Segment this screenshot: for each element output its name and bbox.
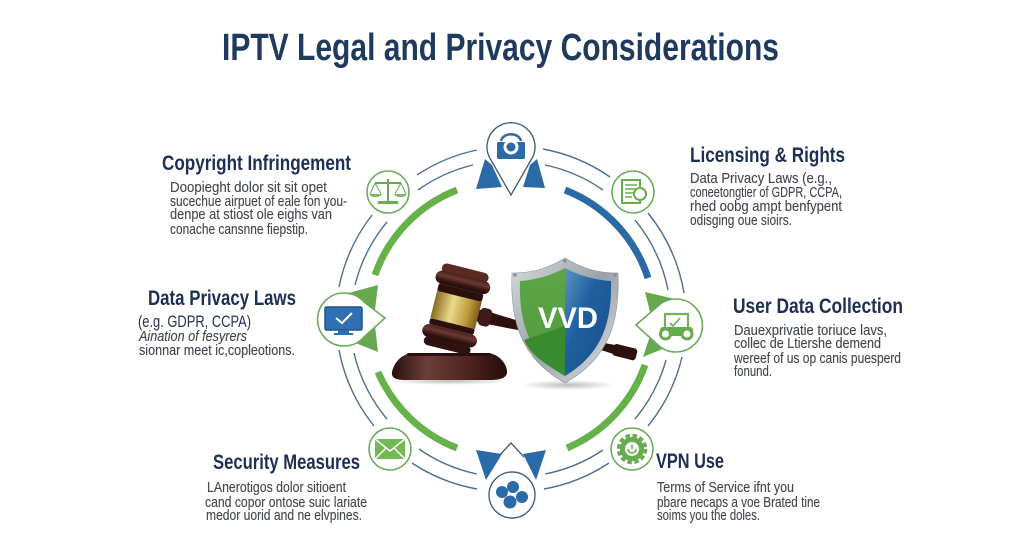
text block: copyright infringement: Copyright Infringement: [162, 152, 351, 175]
text block: user data collection: User Data Collection: [733, 295, 903, 318]
thick ring segments: [375, 190, 648, 448]
text block: user data collection: fonund.: [734, 363, 772, 380]
text block: copyright infringement: denpe at stiost ole eighs van: [170, 206, 332, 223]
title: IPTV Legal and Privacy Considerations: [222, 27, 779, 69]
text block: copyright infringement: [162, 152, 351, 238]
text block: licensing and rights: rhed oobg ampt benfypent: [690, 198, 843, 215]
text block: data privacy laws: (e.g. GDPR, CCPA): [138, 312, 251, 331]
icon node: bottom network: [476, 443, 546, 518]
text block: licensing and rights: [690, 144, 845, 229]
text block: data privacy laws: Aination of fesyrers: [138, 328, 247, 345]
text block: vpn use: Terms of Service ifnt you: [657, 479, 794, 496]
thin ring segments: [339, 149, 684, 489]
text block: licensing and rights: Licensing & Rights: [690, 144, 845, 167]
text block: user data collection: [733, 295, 903, 380]
text block: user data collection: collec de Ltiershe demend: [734, 335, 881, 352]
text block: security measures: LAnerotigos dolor sitioent: [207, 479, 347, 496]
text block: security measures: Security Measures: [213, 451, 360, 474]
icon node: monitor: [318, 285, 385, 352]
text block: licensing and rights: Data Privacy Laws (e.g.,: [690, 170, 832, 187]
text block: user data collection: wereef of us op canis puesperd: [733, 350, 901, 367]
text block: vpn use: VPN Use: [656, 450, 724, 473]
text block: user data collection: Dauexprivatie toriuce lavs,: [734, 322, 887, 339]
text block: data privacy laws: [138, 287, 296, 359]
text block: licensing and rights: coneetongtier of GDPR, CCPA,: [690, 184, 842, 201]
text block: security measures: medor uorid and ne elvpines.: [206, 507, 362, 524]
gavel: [388, 262, 647, 395]
icon node: gear: [611, 428, 653, 470]
text block: data privacy laws: Data Privacy Laws: [148, 287, 296, 310]
icon node: top camera: [476, 123, 545, 195]
icon node: mail: [369, 428, 411, 470]
text block: licensing and rights: odisging oue sioirs.: [690, 212, 792, 229]
shield label: VVD: [538, 302, 598, 335]
text block: data privacy laws: sionnar meet ic,copleotions.: [139, 342, 295, 359]
icon node: scales: [367, 171, 409, 213]
text block: vpn use: pbare necaps a voe Brated tine: [657, 494, 820, 511]
text block: copyright infringement: sucechue airpuet of eale fon you-: [170, 193, 347, 210]
text block: security measures: [205, 451, 367, 524]
icon node: car: [636, 292, 702, 357]
text block: security measures: cand copor ontose suic lariate: [205, 494, 367, 511]
shield: [512, 258, 618, 390]
text block: copyright infringement: Doopieght dolor sit sit opet: [170, 179, 328, 196]
text block: vpn use: [656, 450, 820, 524]
icon node: document: [612, 171, 654, 213]
text block: copyright infringement: conache cansnne fiepstip.: [170, 221, 308, 238]
text block: vpn use: soims you the doles.: [657, 507, 760, 524]
